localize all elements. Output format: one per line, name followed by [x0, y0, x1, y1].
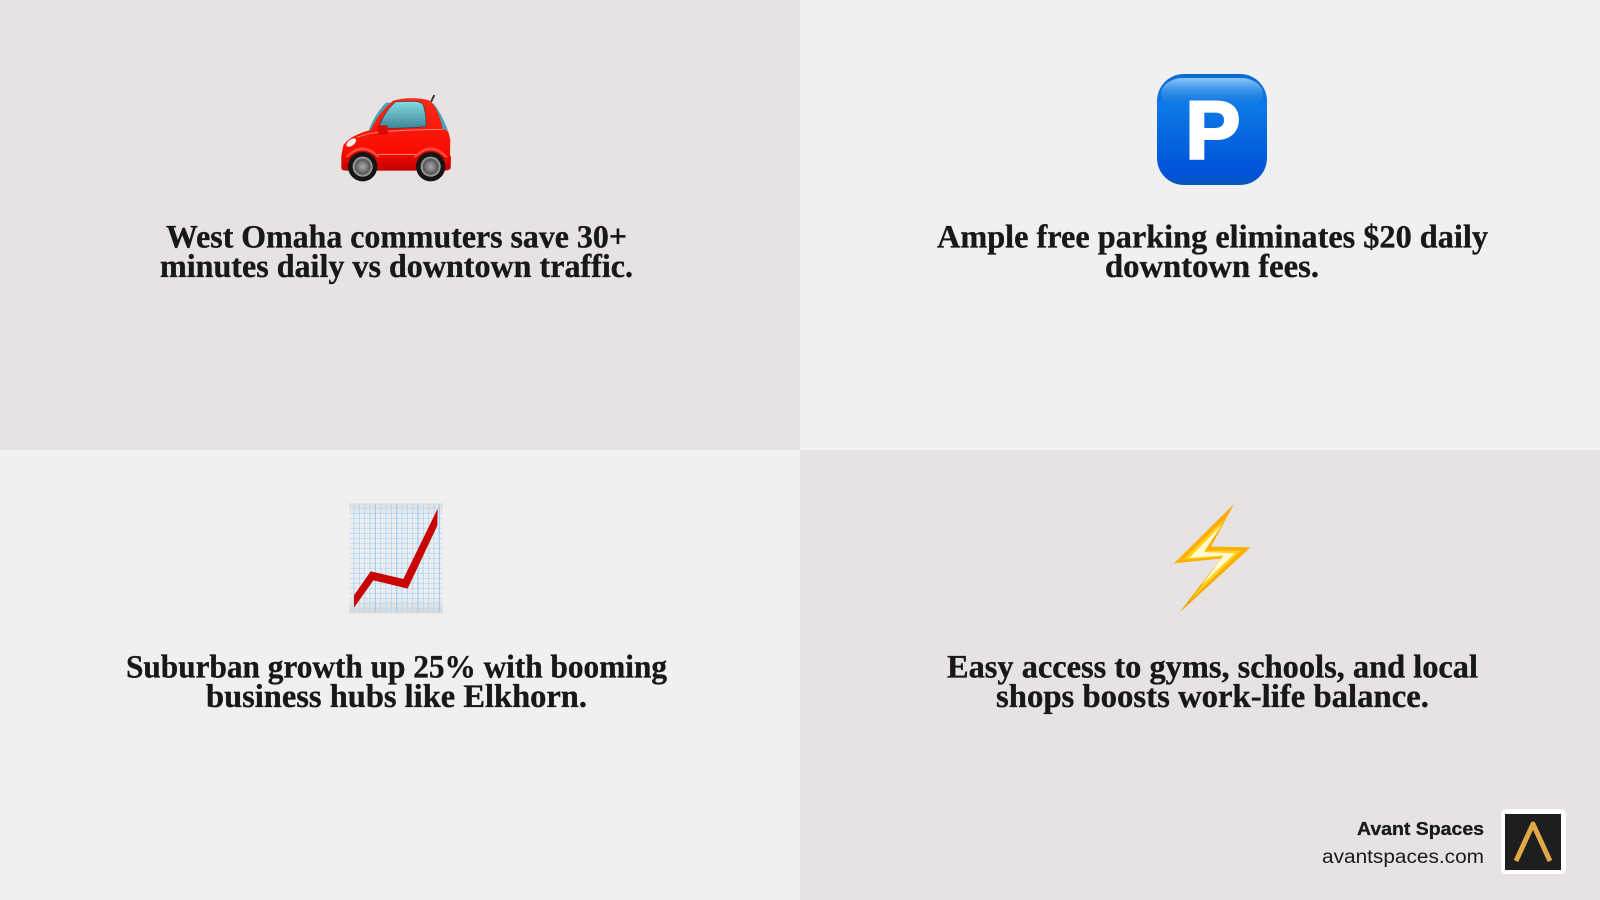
heading: balance: shops boosts work-life balance. — [996, 679, 1429, 715]
icon: red car — [341, 95, 451, 181]
heading: balance — [947, 650, 1478, 715]
icon: rising chart — [349, 503, 443, 613]
heading: parking: Ample free parking eliminates $20 daily — [937, 220, 1488, 256]
icon: parking sign: P — [1186, 86, 1240, 176]
heading: balance: Easy access to gyms, schools, and local — [947, 650, 1478, 686]
heading: growth — [126, 650, 667, 715]
logo — [1501, 809, 1566, 874]
heading: commute: minutes daily vs downtown traffic. — [160, 249, 633, 285]
panel: parking — [800, 0, 1600, 450]
heading: parking: downtown fees. — [1105, 249, 1319, 285]
heading: commute: West Omaha commuters save 30+ — [166, 220, 627, 256]
heading: growth: business hubs like Elkhorn. — [206, 679, 587, 715]
icon: lightning bolt — [1174, 504, 1251, 613]
heading: commute — [160, 220, 633, 285]
brand name and URL: Avant Spaces — [1357, 819, 1484, 839]
heading: growth: Suburban growth up 25% with booming — [126, 650, 667, 686]
heading: parking — [937, 220, 1488, 285]
brand name and URL — [1322, 819, 1484, 868]
brand name and URL: avantspaces.com — [1322, 847, 1484, 868]
panel: balance — [800, 450, 1600, 900]
icon: parking sign — [1157, 74, 1267, 185]
panel: growth — [0, 450, 800, 900]
panel: commute — [0, 0, 800, 450]
